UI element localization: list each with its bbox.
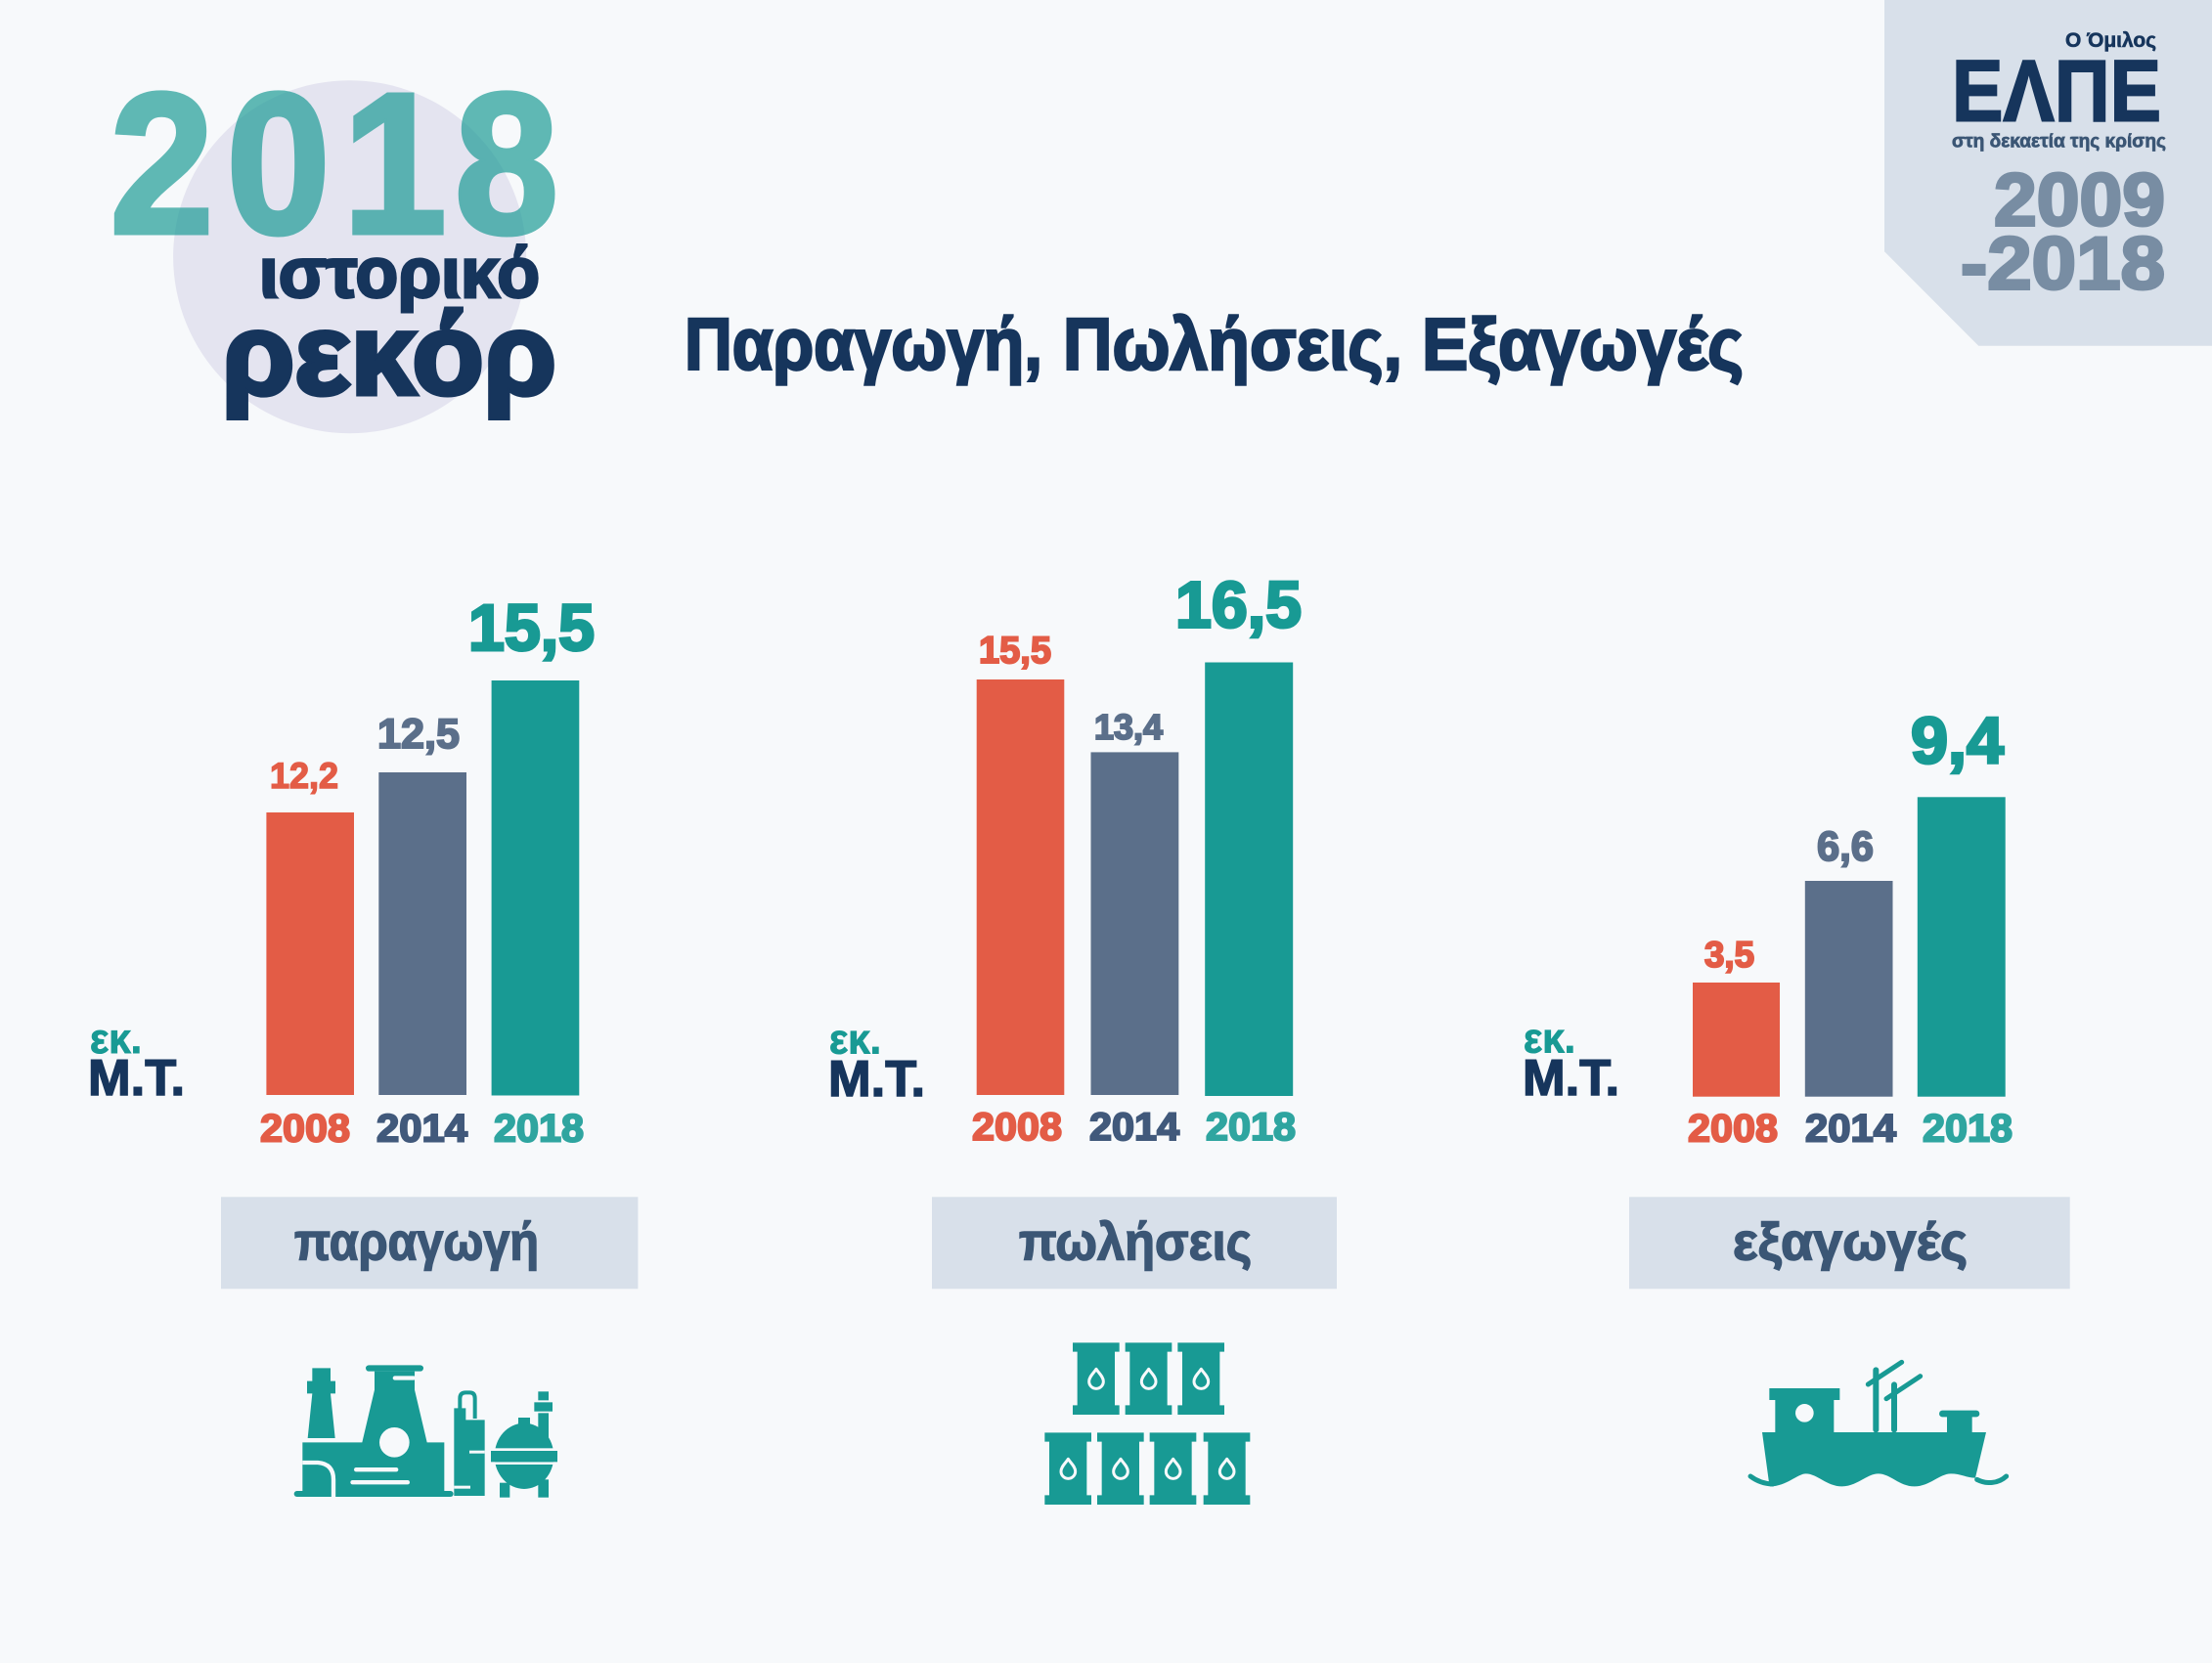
year 2018: 2018: [494, 1107, 584, 1150]
category label: production: [221, 1197, 638, 1289]
value 2018: 9,4: [1911, 704, 2004, 778]
chart: production: [88, 591, 595, 1150]
word: ρεκόρ: ρεκόρ: [222, 290, 556, 419]
unit label: Μ.Τ.: [828, 1051, 925, 1108]
main title: [685, 303, 1744, 385]
unit label: [828, 1017, 925, 1108]
main title: Εξαγωγές: [1422, 303, 1744, 385]
value 2014: 6,6: [1817, 823, 1874, 870]
badge logo text: ΕΛΠΕ: [1952, 41, 2161, 139]
year 2014: 2014: [1805, 1107, 1897, 1150]
bar 2018: [1918, 797, 2006, 1097]
main title: Παραγωγή,: [685, 303, 1042, 385]
year 2008: 2008: [972, 1106, 1062, 1149]
decorative circle behind headline: [173, 80, 526, 433]
chart: sales: [828, 569, 1302, 1149]
badge background: [1884, 0, 2212, 346]
category label: exports: [1629, 1197, 2070, 1289]
corner panel: series badge: [1884, 0, 2212, 346]
unit label: [88, 1016, 185, 1107]
value 2018: 16,5: [1175, 569, 1302, 641]
badge overline: Ο Όμιλος: [2065, 29, 2156, 52]
bar 2008: [266, 812, 354, 1095]
value 2014: 13,4: [1094, 707, 1163, 747]
value 2008: 12,2: [270, 756, 338, 796]
year 2014: 2014: [376, 1107, 468, 1150]
year 2008: 2008: [1688, 1107, 1778, 1150]
value 2014: 12,5: [377, 711, 460, 758]
category label: sales: [932, 1197, 1337, 1289]
unit label: [1523, 1015, 1619, 1107]
bar 2008: [1693, 983, 1780, 1097]
unit label: εκ.: [1524, 1015, 1575, 1062]
badge subtitle: στη δεκαετία της κρίσης: [1952, 131, 2166, 153]
unit label: Μ.Τ.: [88, 1050, 185, 1107]
icon: tanker ship: [1750, 1362, 2007, 1486]
bar 2018: [492, 680, 579, 1095]
badge years -2018: -2018: [1961, 223, 2165, 305]
value 2008: 3,5: [1704, 935, 1754, 975]
bar 2014: [1091, 752, 1178, 1095]
bar 2014: [1805, 881, 1893, 1097]
unit label: Μ.Τ.: [1523, 1050, 1619, 1107]
headline block: 2018 historic record: [111, 52, 558, 433]
bar 2018: [1205, 663, 1293, 1096]
category label: sales: πωλήσεις: [1019, 1212, 1252, 1271]
value 2008: 15,5: [979, 630, 1051, 672]
chart: exports: [1523, 704, 2013, 1150]
main title: Πωλήσεις,: [1063, 303, 1402, 385]
year 2018: 2018: [111, 52, 558, 275]
year 2008: 2008: [260, 1107, 350, 1150]
badge years 2009: 2009: [1994, 158, 2165, 242]
icon: oil barrels: [1044, 1342, 1250, 1505]
year 2018: 2018: [1206, 1106, 1296, 1149]
value 2018: 15,5: [468, 591, 595, 665]
unit label: εκ.: [829, 1017, 881, 1064]
word: ιστορικό: ιστορικό: [259, 235, 540, 313]
category label: production: παραγωγή: [294, 1212, 539, 1271]
bar 2008: [977, 679, 1064, 1095]
category label: exports: εξαγωγές: [1733, 1212, 1968, 1271]
year 2018: 2018: [1923, 1107, 2013, 1150]
icon: refinery: [294, 1365, 560, 1498]
bar 2014: [378, 772, 466, 1095]
unit label: εκ.: [90, 1016, 142, 1063]
year 2014: 2014: [1089, 1106, 1180, 1149]
